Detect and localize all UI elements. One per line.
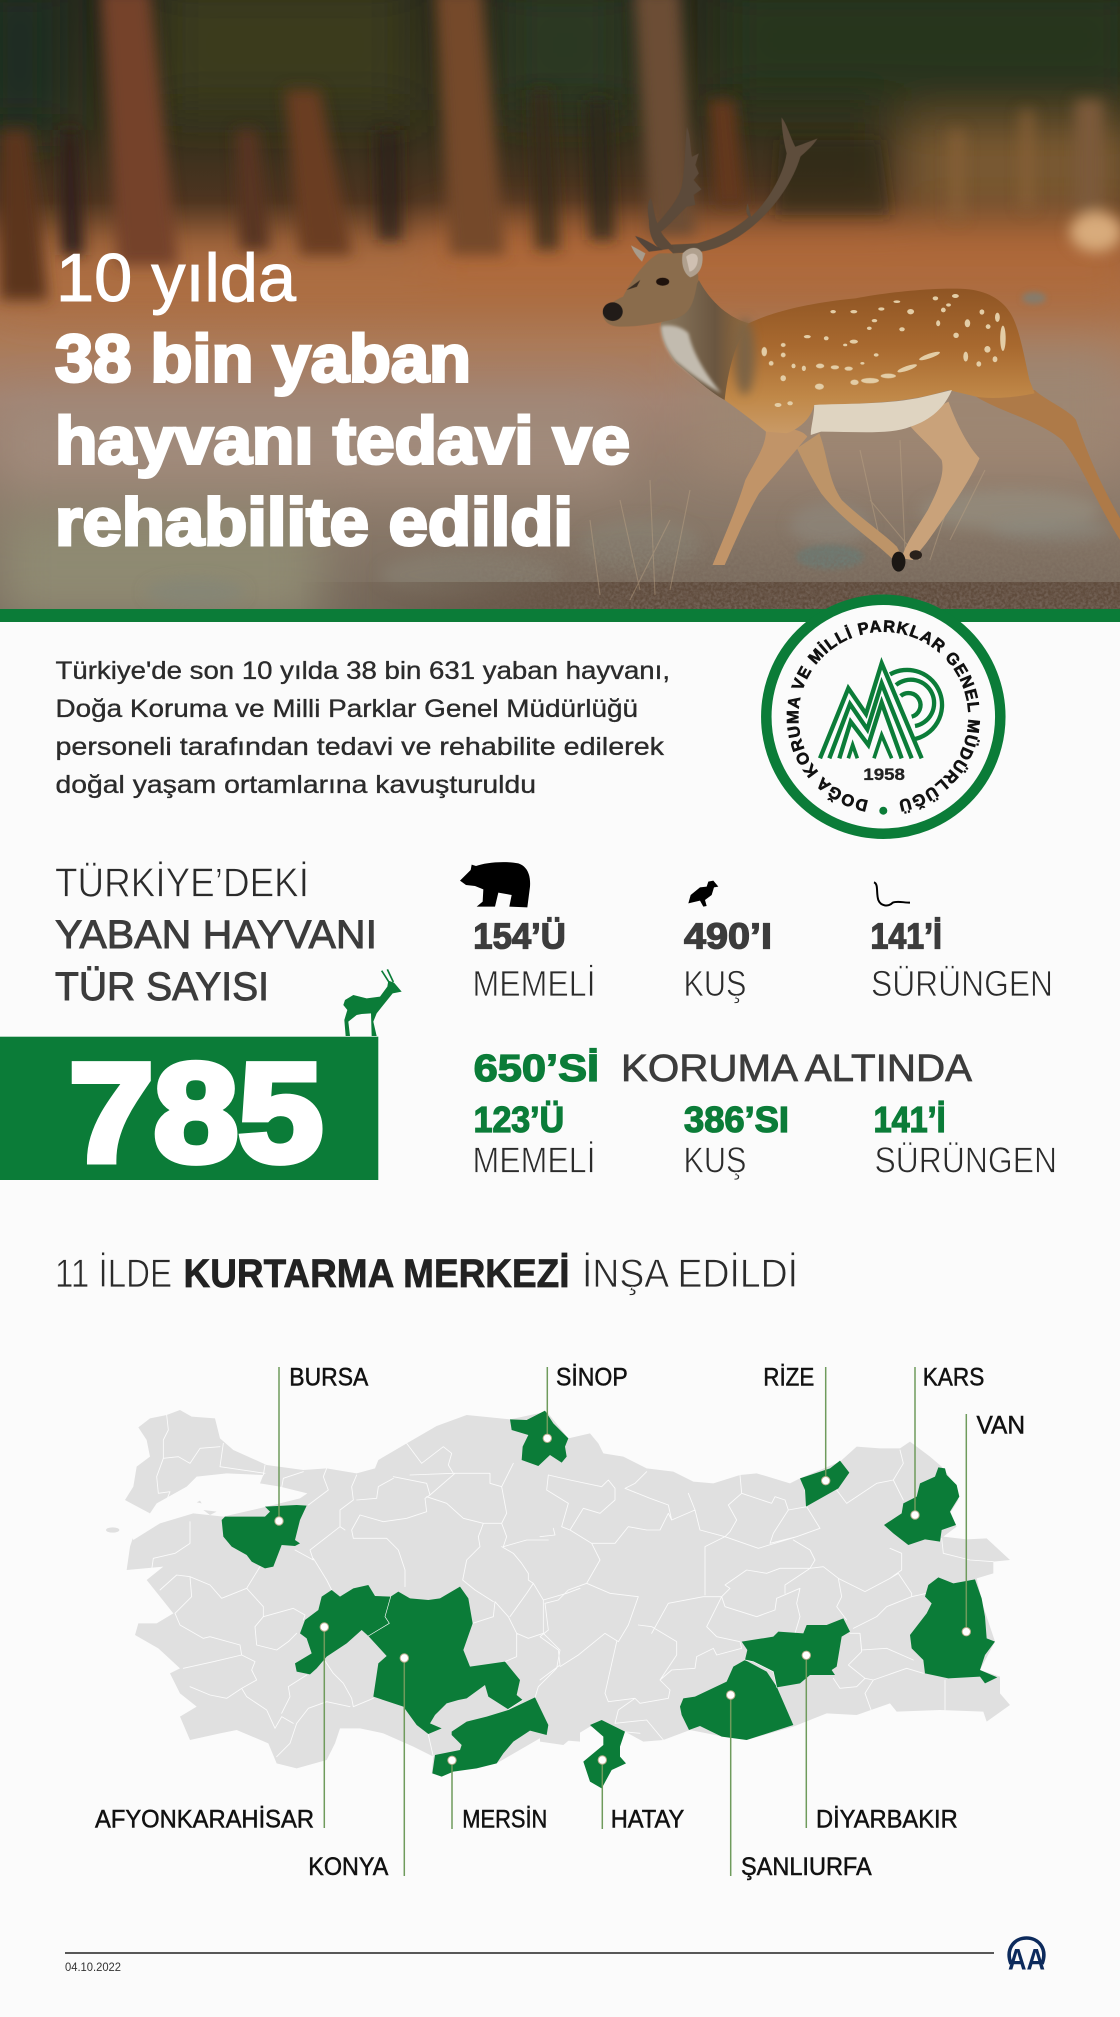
label: Afyonkarahisar: AFYONKARAHİSAR: [95, 1804, 314, 1833]
protected reptiles: SÜRÜNGEN: [874, 1140, 1057, 1181]
stat: birds: KUŞ: [684, 963, 746, 1004]
icon: bear: [460, 862, 530, 907]
icon: bird: [688, 881, 718, 907]
label: Diyarbakır: [802, 1651, 958, 1833]
Bursa province: [222, 1505, 307, 1568]
protected heading: [474, 1048, 973, 1090]
heading: species count: TÜRKİYE’DEKİ: [55, 860, 309, 906]
protected birds: 386’SI: [684, 1099, 789, 1140]
title: hayvanı tedavi ve: [55, 404, 630, 478]
protected birds: KUŞ: [684, 1140, 746, 1181]
label: Mersin: [448, 1756, 547, 1833]
footer rule: [65, 1952, 994, 1954]
icon: gazelle: [343, 969, 402, 1036]
heading: rescue centres: KURTARMA MERKEZİ: [184, 1252, 570, 1296]
province shapes west: [222, 1411, 568, 1777]
heading: rescue centres: İNŞA EDİLDİ: [582, 1251, 798, 1296]
Hatay province: [583, 1720, 626, 1788]
Rize province: [800, 1461, 849, 1507]
Mersin province: [432, 1697, 548, 1777]
Konya province: [368, 1587, 523, 1734]
map province borders: [152, 1415, 580, 1757]
protected heading: 650’Sİ: [474, 1048, 599, 1090]
label: Mersin: MERSİN: [462, 1804, 547, 1833]
label: Kars: [911, 1364, 984, 1519]
total species box: [0, 1034, 378, 1191]
heading: rescue centres: 11 İLDE: [55, 1251, 172, 1296]
heading: species count: TÜR SAYISI: [55, 965, 269, 1009]
label: Kars: KARS: [923, 1364, 984, 1392]
logo year: 1958: [863, 766, 905, 784]
stat: reptiles: [870, 915, 1053, 1004]
Şanlıurfa province: [680, 1660, 793, 1740]
logo: AA: AA: [1008, 1944, 1045, 1976]
protected reptiles: [874, 1099, 1057, 1181]
label: Konya: KONYA: [308, 1853, 389, 1881]
icon: snake: [874, 882, 910, 905]
Van province: [910, 1577, 997, 1683]
label: Afyonkarahisar: [95, 1623, 328, 1833]
heading: rescue centres: [55, 1251, 798, 1296]
protected mammals: [472, 1099, 596, 1181]
intro paragraph: Türkiye'de son 10 yılda 38 bin 631 yaban hayvanı,: [56, 657, 670, 685]
label: Rize: [763, 1363, 830, 1485]
label: Sinop: [543, 1363, 628, 1443]
protected birds: [684, 1099, 789, 1181]
protected mammals: MEMELİ: [472, 1140, 596, 1181]
label: Van: [962, 1411, 1025, 1636]
label: Rize: RİZE: [763, 1363, 814, 1392]
title: [55, 240, 630, 560]
map base: [106, 1410, 1010, 1777]
label: Sinop: SİNOP: [556, 1363, 628, 1392]
intro paragraph: personeli tarafından tedavi ve rehabilite edilerek: [56, 733, 665, 761]
Afyonkarahisar province: [295, 1585, 391, 1674]
Diyarbakır province: [742, 1618, 850, 1687]
stat: reptiles: 141’İ: [870, 915, 942, 956]
heading: species count: YABAN HAYVANI: [55, 913, 377, 957]
stats: protected species: [472, 1048, 1057, 1181]
total species box: 785: [69, 1034, 323, 1191]
logo: Doğa Koruma ve Milli Parklar Genel Müdürlüğü: [761, 594, 1006, 839]
Sinop province: [510, 1411, 568, 1466]
stats: total by class: [472, 915, 1053, 1004]
title: rehabilite edildi: [55, 485, 573, 560]
shared province outlines: [368, 1597, 523, 1709]
stat: reptiles: SÜRÜNGEN: [871, 963, 1053, 1004]
label: Hatay: HATAY: [611, 1805, 685, 1833]
protected reptiles: 141’İ: [874, 1099, 946, 1140]
heading: species count: [55, 860, 377, 1009]
intro paragraph: Doğa Koruma ve Milli Parklar Genel Müdürlüğü: [56, 695, 638, 723]
label: Diyarbakır: DİYARBAKIR: [816, 1804, 958, 1833]
green band: [0, 609, 1120, 622]
label: Bursa: BURSA: [289, 1364, 369, 1392]
deer: [602, 117, 1120, 572]
stat: mammals: 154’Ü: [473, 915, 566, 956]
logo dot: [879, 807, 887, 815]
logo ring text: DOĞA KORUMA VE MİLLİ PARKLAR GENEL MÜDÜRLÜĞÜ: [786, 620, 980, 814]
protected heading: KORUMA ALTINDA: [621, 1048, 973, 1090]
footer date: 04.10.2022: [65, 1962, 121, 1974]
province shapes east: [583, 1461, 997, 1788]
intro paragraph: [56, 657, 670, 799]
label: Hatay: [598, 1756, 685, 1833]
protected mammals: 123’Ü: [474, 1099, 564, 1140]
stat: birds: [684, 915, 772, 1004]
label: Bursa: [275, 1364, 369, 1525]
label: Konya: [308, 1654, 408, 1881]
title: 10 yılda: [56, 240, 296, 316]
stat: mammals: MEMELİ: [472, 963, 596, 1004]
label: Şanlıurfa: ŞANLIURFA: [741, 1853, 872, 1881]
map of Turkey: [95, 1363, 1025, 1881]
label: Şanlıurfa: [726, 1691, 872, 1881]
logo mountain and arcs emblem: [820, 663, 942, 758]
label: Van: VAN: [976, 1411, 1025, 1439]
stat: birds: 490’I: [684, 915, 772, 956]
title: 38 bin yaban: [55, 322, 471, 396]
stat: mammals: [472, 915, 596, 1004]
intro paragraph: doğal yaşam ortamlarına kavuşturuldu: [56, 771, 536, 799]
Kars province: [884, 1467, 959, 1545]
hero photo: deer in forest: [0, 0, 1120, 620]
